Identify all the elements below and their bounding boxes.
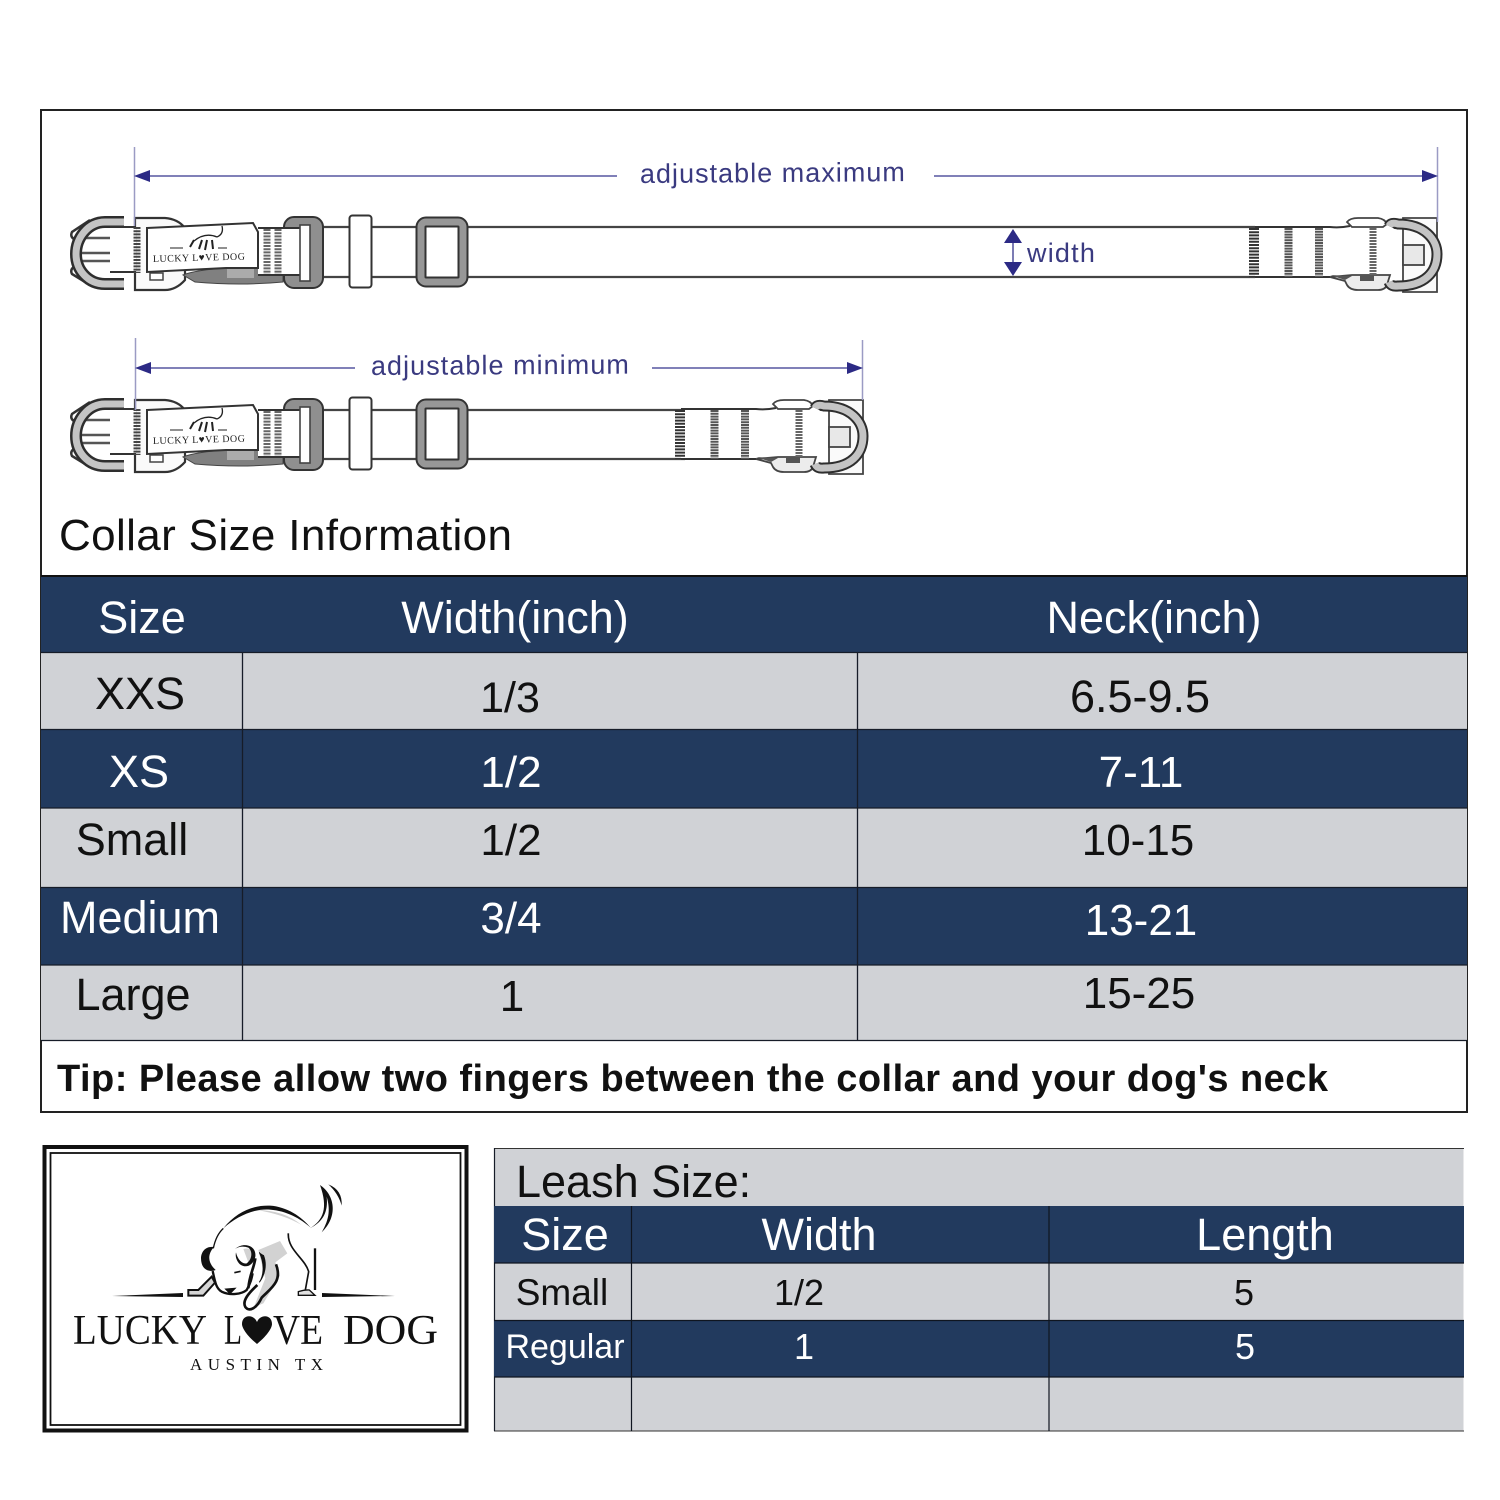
header row bbox=[98, 592, 1262, 643]
diagram: adjustable minimum collar bbox=[71, 338, 863, 474]
logo tagline: AUSTIN TX bbox=[190, 1355, 323, 1374]
dimension arrow: minimum bbox=[135, 338, 863, 410]
table: collar sizes bbox=[41, 576, 1467, 1041]
collar strap bbox=[323, 410, 685, 459]
row: Large bbox=[75, 969, 1195, 1021]
dimension arrow: maximum: adjustable maximum bbox=[640, 157, 906, 189]
icon: ground lines bbox=[112, 1293, 395, 1297]
buckle label: LUCKY L♥VE DOG bbox=[153, 434, 245, 447]
row: XS: 7-11 bbox=[1099, 748, 1183, 797]
header row: Neck(inch) bbox=[1046, 592, 1262, 643]
tip: Tip: Please allow two fingers between the collar and your dog's neck bbox=[57, 1058, 1329, 1100]
row: Large: Large bbox=[75, 969, 191, 1020]
ring end bbox=[680, 400, 863, 474]
row: Large: 1 bbox=[500, 972, 524, 1021]
logo wordmark: L bbox=[224, 1308, 242, 1354]
header row: Width(inch) bbox=[401, 592, 629, 643]
icon: heart bbox=[242, 1316, 272, 1344]
leash row: regular: Regular bbox=[505, 1328, 625, 1366]
leash header row: Size bbox=[521, 1209, 609, 1260]
row: XXS: XXS bbox=[95, 668, 185, 719]
row: Small: 1/2 bbox=[480, 816, 542, 865]
leash row: small: 5 bbox=[1234, 1272, 1254, 1313]
collar strap bbox=[323, 227, 1255, 277]
buckle end bbox=[71, 216, 463, 290]
leash row: regular: 5 bbox=[1235, 1326, 1255, 1367]
leash row: small: Small bbox=[516, 1272, 608, 1313]
logo wordmark: VE bbox=[273, 1308, 323, 1354]
row: XS: 1/2 bbox=[480, 748, 542, 797]
ring end bbox=[1254, 218, 1437, 292]
row: Small bbox=[76, 814, 1194, 865]
buckle label: LUCKY L♥VE DOG bbox=[153, 252, 245, 265]
dimension arrow: maximum bbox=[134, 147, 1438, 226]
panel: collar size information bbox=[41, 110, 1467, 1112]
row: XXS: 1/3 bbox=[480, 674, 540, 722]
row: XS bbox=[109, 746, 1183, 797]
leash row: small: 1/2 bbox=[774, 1272, 824, 1313]
icon: dog bbox=[188, 1184, 342, 1309]
row: XS: XS bbox=[109, 746, 169, 797]
heading: collar size information: Collar Size Information bbox=[59, 511, 512, 560]
row: Medium bbox=[60, 892, 1197, 945]
logo wordmark bbox=[73, 1308, 438, 1354]
dimension arrow: width: width bbox=[1026, 238, 1096, 268]
row: Large: 15-25 bbox=[1083, 969, 1195, 1018]
panel: brand logo bbox=[44, 1147, 466, 1430]
leash heading: Leash Size: bbox=[516, 1156, 751, 1207]
leash header row: Length bbox=[1196, 1209, 1334, 1260]
row: Small: Small bbox=[76, 814, 188, 865]
dimension arrow: minimum: adjustable minimum bbox=[371, 350, 630, 381]
leash row: regular bbox=[505, 1326, 1255, 1367]
row: Medium: 13-21 bbox=[1085, 896, 1197, 945]
buckle end bbox=[71, 398, 463, 472]
row: Medium: 3/4 bbox=[480, 894, 542, 943]
leash row: regular: 1 bbox=[794, 1326, 814, 1367]
diagram: adjustable maximum collar bbox=[71, 147, 1438, 292]
row: Small: 10-15 bbox=[1082, 816, 1194, 865]
logo wordmark: DOG bbox=[343, 1308, 438, 1354]
row: Medium: Medium bbox=[60, 892, 220, 943]
logo wordmark: LUCKY bbox=[73, 1308, 207, 1354]
leash header row bbox=[521, 1209, 1334, 1260]
row: XXS bbox=[95, 668, 1210, 722]
row: XXS: 6.5-9.5 bbox=[1070, 671, 1210, 722]
leash row: small bbox=[516, 1272, 1254, 1313]
leash header row: Width bbox=[761, 1209, 877, 1260]
dimension arrow: width bbox=[1004, 229, 1096, 276]
table: leash sizes bbox=[494, 1148, 1464, 1431]
header row: Size bbox=[98, 592, 186, 643]
